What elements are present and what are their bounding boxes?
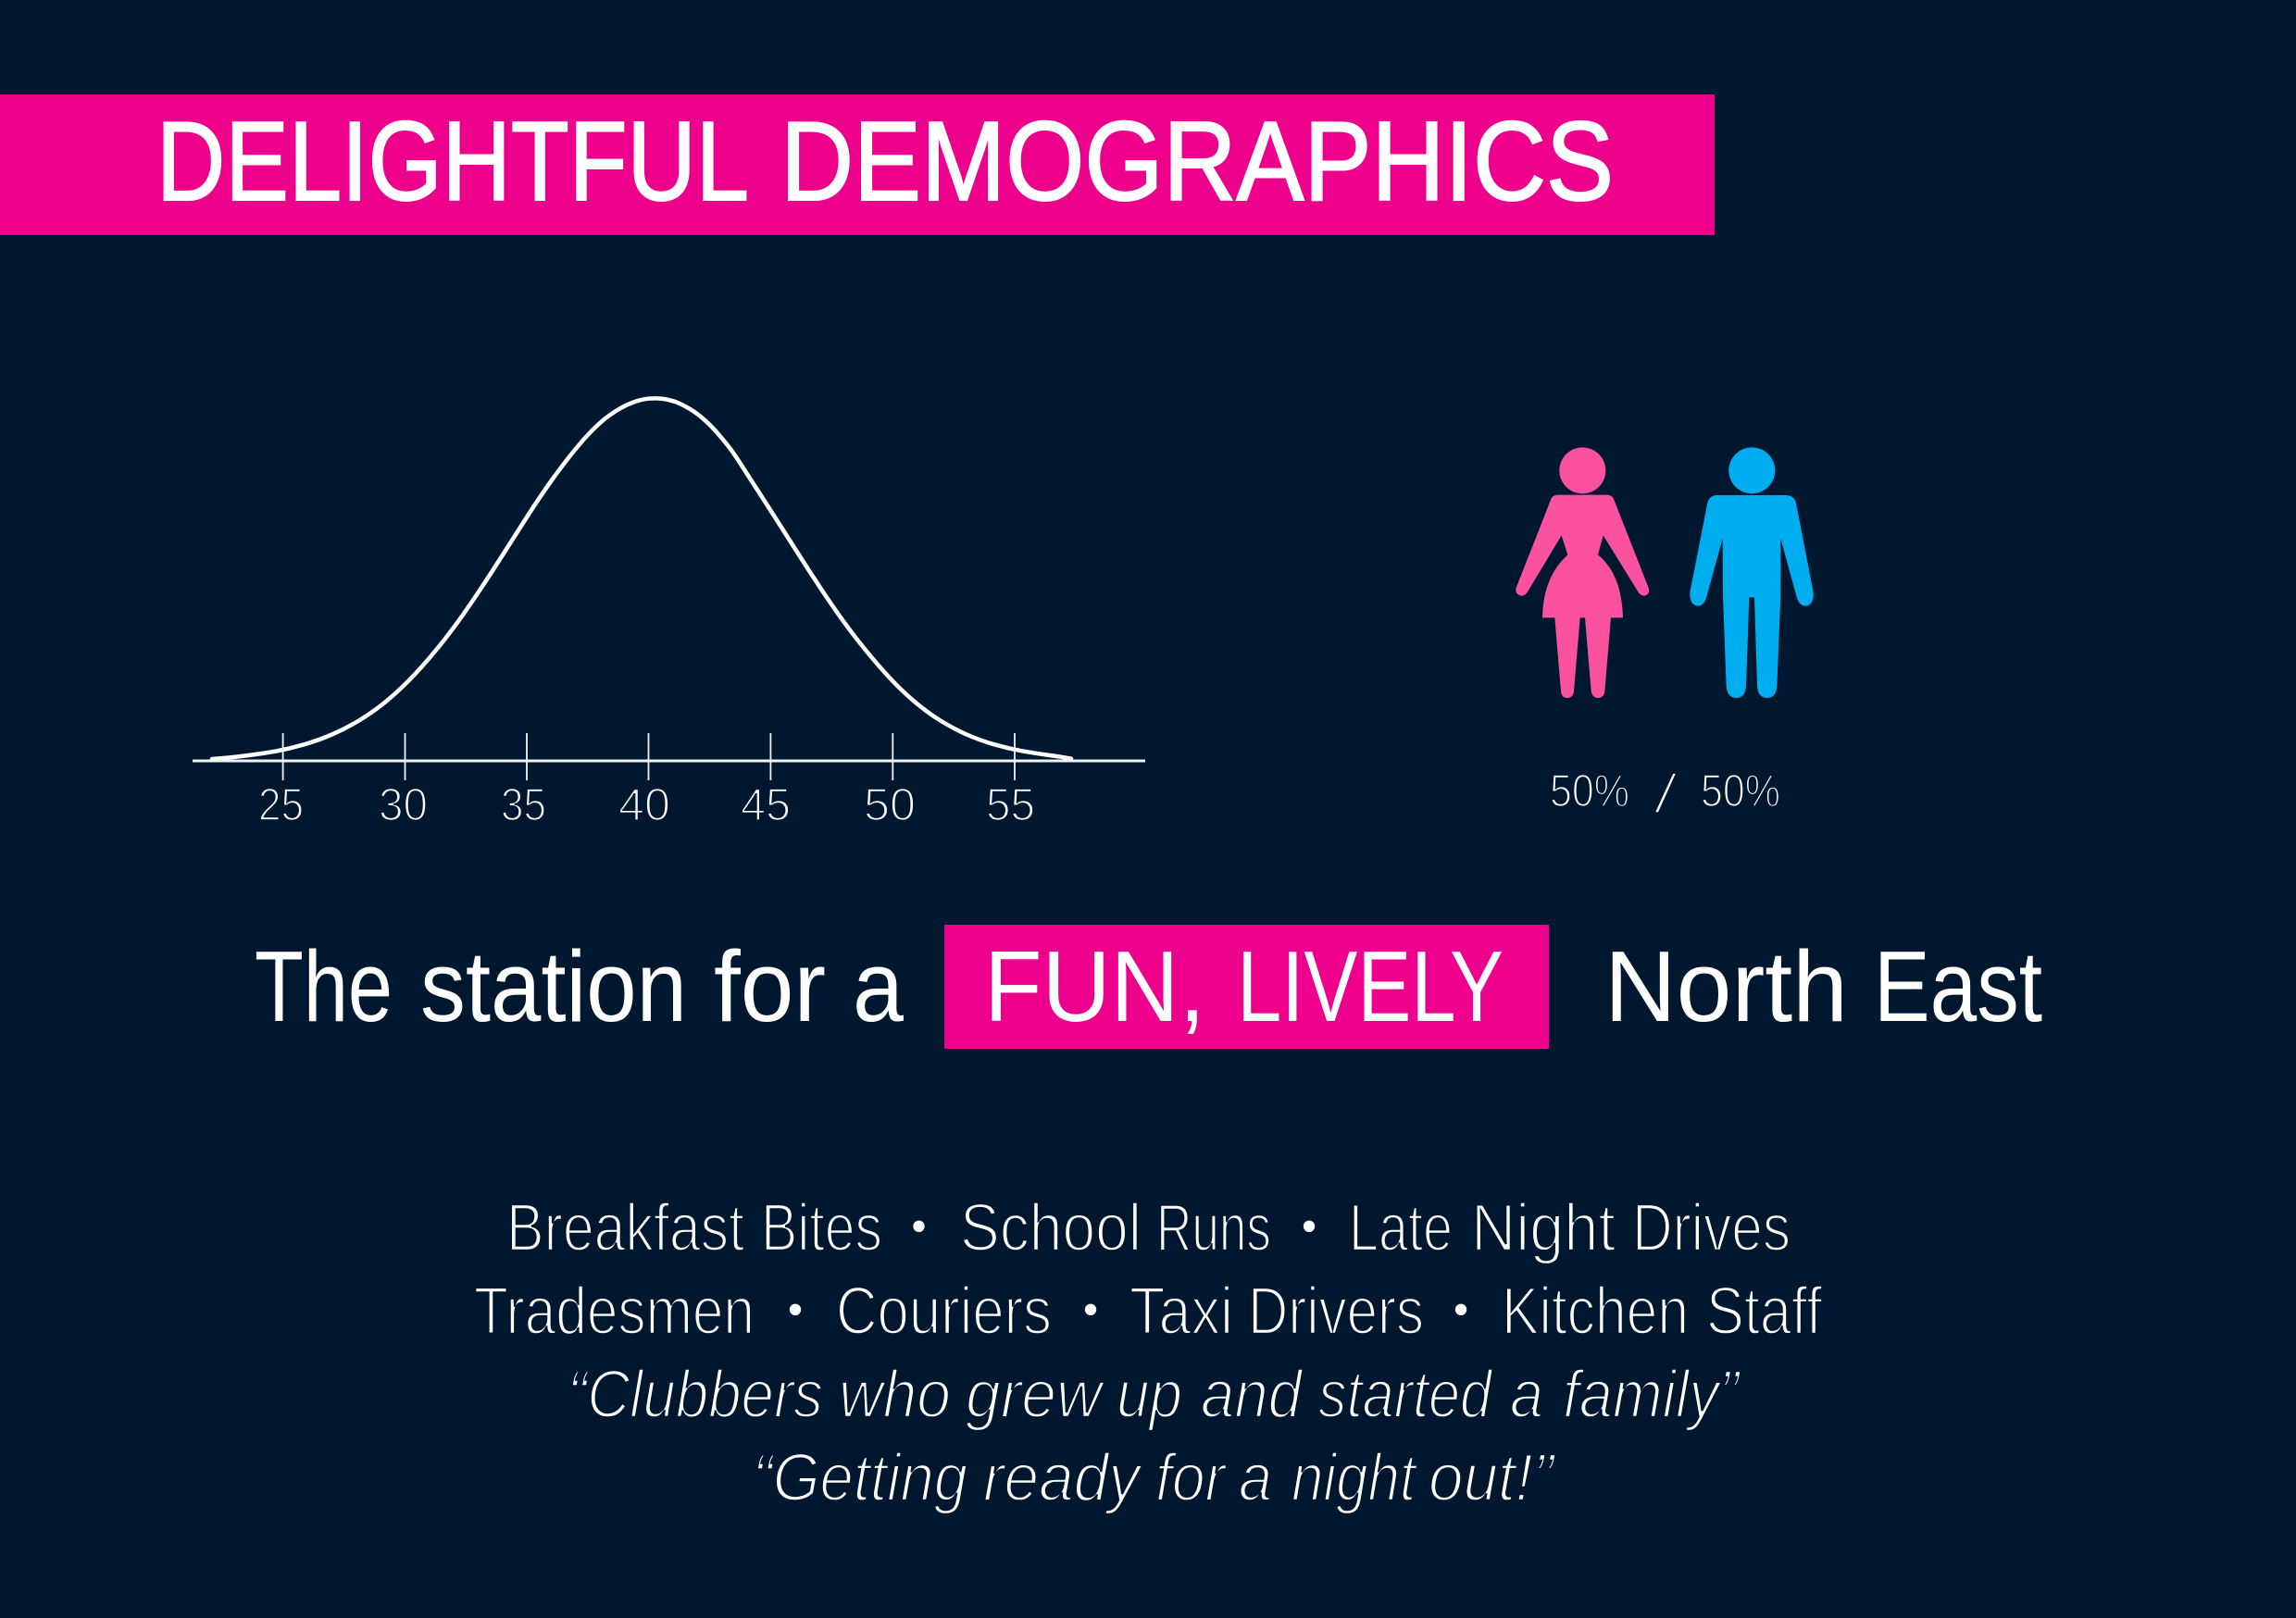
quote 2: “Getting bbox=[753, 1441, 967, 1515]
tagline end bbox=[1604, 930, 2042, 1043]
audience list bbox=[474, 1188, 1823, 1515]
quote 2: ready bbox=[983, 1441, 1143, 1515]
icon: man bbox=[1690, 447, 1814, 698]
highlighted words: FUN, bbox=[984, 930, 1205, 1043]
quote 1: “Clubbers bbox=[568, 1358, 823, 1432]
quote 2: night bbox=[1292, 1441, 1418, 1515]
axis labels: 30 bbox=[379, 780, 428, 830]
title banner bbox=[0, 94, 1715, 235]
quote 2: for bbox=[1155, 1441, 1228, 1515]
audience line 2: · bbox=[783, 1271, 807, 1349]
audience line 1: Night bbox=[1471, 1191, 1616, 1265]
axis labels: 45 bbox=[741, 780, 791, 830]
audience line 1: · bbox=[907, 1188, 930, 1265]
audience line 2: Tradesmen bbox=[474, 1275, 755, 1349]
audience line 1: School bbox=[960, 1191, 1142, 1265]
gender percentages: 50% bbox=[1701, 766, 1780, 816]
highlighted words: LIVELY bbox=[1237, 930, 1504, 1043]
axis labels: 50 bbox=[864, 780, 916, 830]
audience line 2: Couriers bbox=[836, 1275, 1052, 1349]
audience line 1: Runs bbox=[1156, 1191, 1271, 1265]
audience line 1: Breakfast bbox=[506, 1191, 744, 1265]
quote 2: a bbox=[1239, 1441, 1272, 1515]
axis labels bbox=[258, 780, 1035, 830]
audience line 2: Staff bbox=[1706, 1275, 1823, 1349]
axis labels: 35 bbox=[501, 780, 546, 830]
axis ticks bbox=[283, 733, 1015, 780]
quote 1: who bbox=[839, 1358, 951, 1432]
tagline end: North bbox=[1604, 930, 1848, 1043]
quote 2 bbox=[753, 1441, 1556, 1515]
quote 1: and bbox=[1201, 1358, 1304, 1432]
quote 1: started bbox=[1318, 1358, 1493, 1432]
audience line 2: · bbox=[1449, 1271, 1473, 1349]
gender split bbox=[1516, 447, 1814, 825]
audience line 1: Drives bbox=[1632, 1191, 1791, 1265]
axis labels: 40 bbox=[618, 780, 670, 830]
tagline lead bbox=[255, 930, 904, 1043]
quote 1: grew bbox=[966, 1358, 1105, 1432]
audience line 1: · bbox=[1297, 1188, 1321, 1265]
gender percentages: 50% bbox=[1550, 766, 1629, 816]
tagline lead: for bbox=[714, 930, 826, 1043]
audience line 2: · bbox=[1079, 1271, 1103, 1349]
tagline bbox=[255, 925, 2042, 1049]
tagline lead: a bbox=[853, 930, 904, 1043]
quote 1: family” bbox=[1563, 1358, 1741, 1432]
audience line 2: Kitchen bbox=[1502, 1275, 1689, 1349]
gender percentages: / bbox=[1653, 763, 1679, 825]
audience line 1: Late bbox=[1349, 1191, 1453, 1265]
highlighted words bbox=[984, 930, 1504, 1043]
quote 1 bbox=[568, 1358, 1741, 1432]
tagline lead: station bbox=[420, 930, 687, 1043]
title: DEMOGRAPHICS bbox=[780, 98, 1614, 224]
audience line 1: Bites bbox=[761, 1191, 882, 1265]
quote 2: out!” bbox=[1429, 1441, 1556, 1515]
audience line 2: Taxi bbox=[1129, 1275, 1233, 1349]
tagline lead: The bbox=[255, 930, 393, 1043]
gender percentages bbox=[1550, 763, 1780, 825]
audience line 2 bbox=[474, 1271, 1823, 1349]
quote 1: a bbox=[1510, 1358, 1543, 1432]
audience line 1 bbox=[506, 1188, 1791, 1265]
highlight box bbox=[944, 925, 1549, 1049]
audience line 2: Drivers bbox=[1248, 1275, 1424, 1349]
tagline end: East bbox=[1874, 930, 2042, 1043]
icon: woman bbox=[1516, 447, 1649, 698]
age distribution chart bbox=[193, 398, 1145, 830]
bell curve bbox=[212, 398, 1071, 759]
title: DELIGHTFUL bbox=[156, 98, 749, 224]
axis labels: 25 bbox=[258, 780, 304, 830]
title bbox=[156, 98, 1614, 224]
x axis bbox=[193, 759, 1145, 763]
quote 1: up bbox=[1117, 1358, 1182, 1432]
axis labels: 55 bbox=[986, 780, 1035, 830]
